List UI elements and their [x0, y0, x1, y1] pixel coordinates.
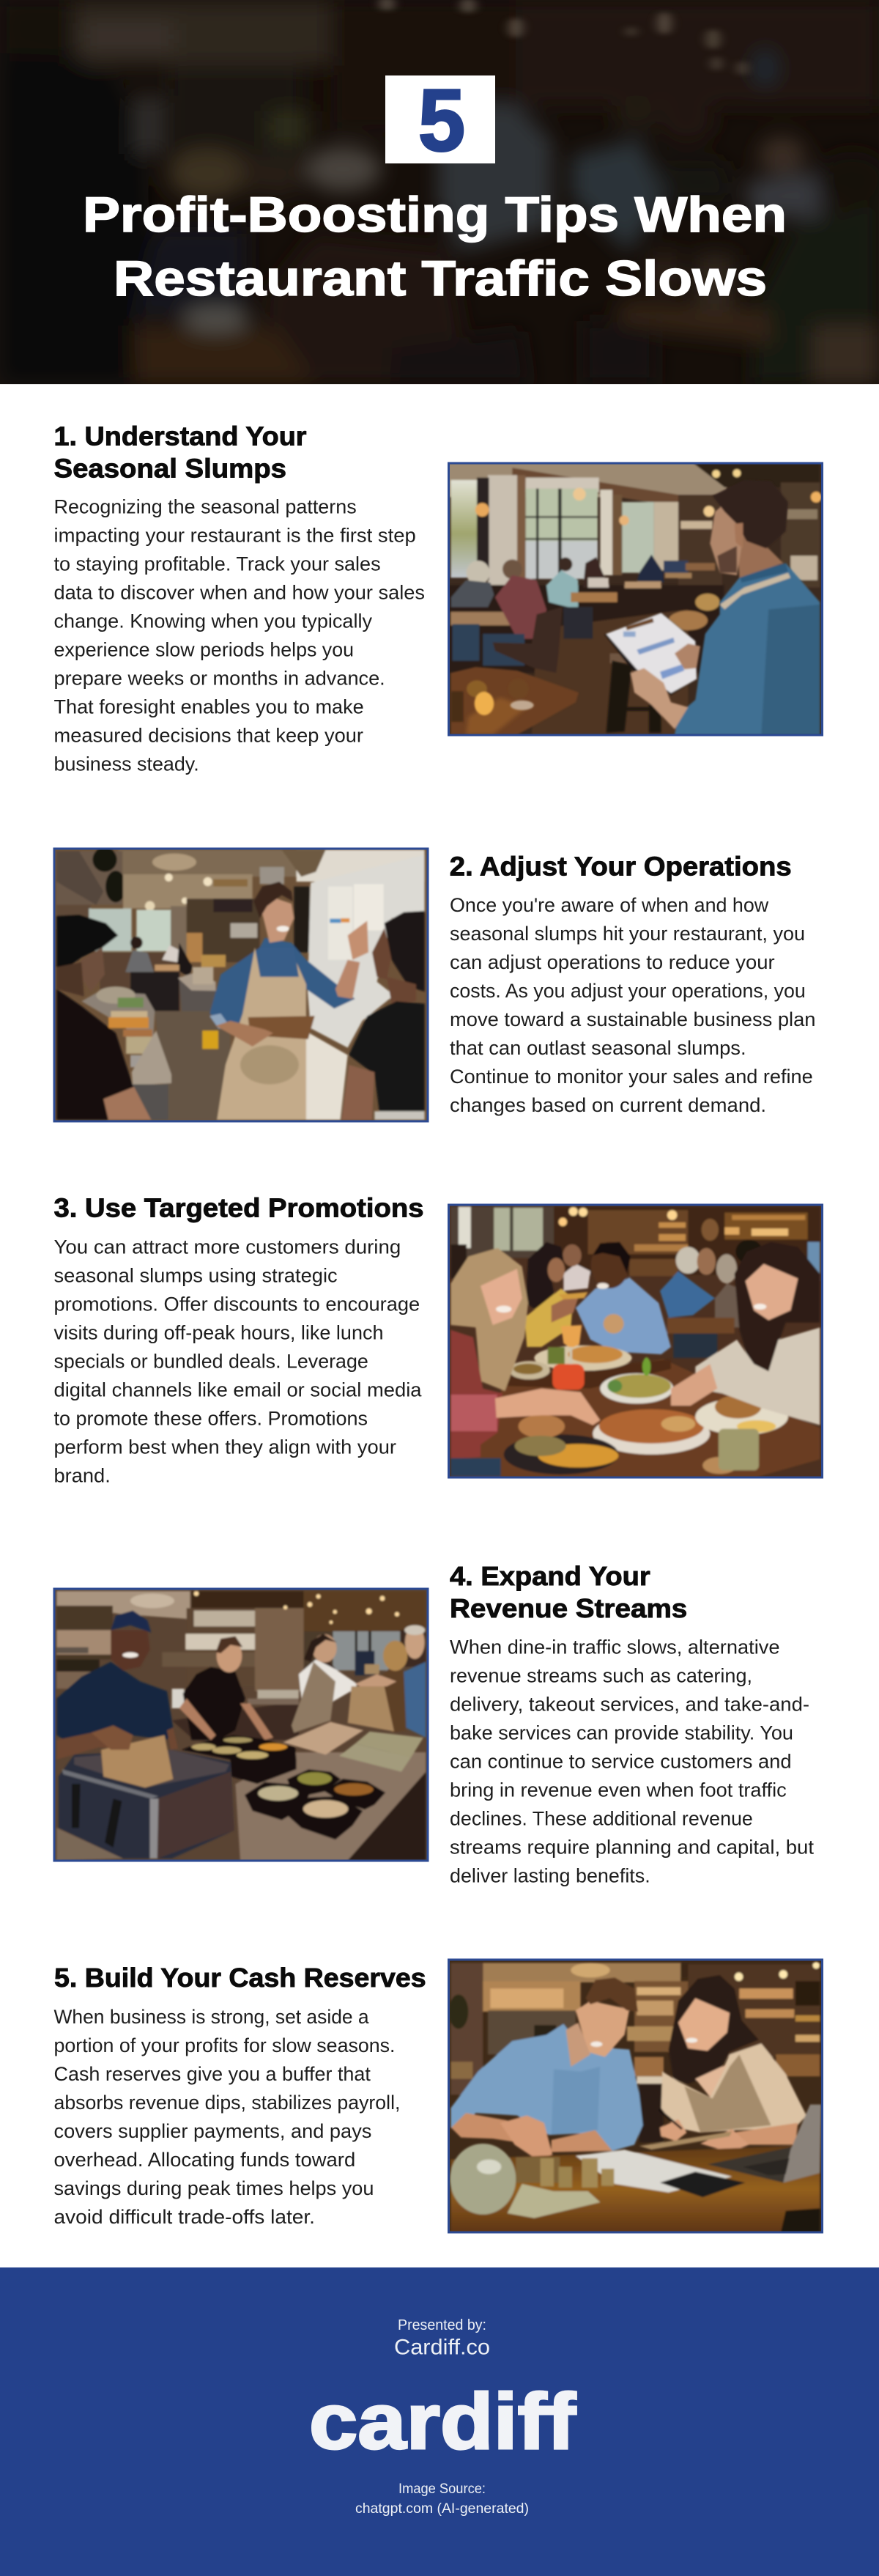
tip 5 panel: [54, 1960, 822, 2232]
hero background photo: dim restaurant interior: [0, 0, 879, 384]
tip 1 body text: data to discover when and how your sales: [54, 582, 425, 604]
tip 3 body text: specials or bundled deals. Leverage: [54, 1350, 368, 1372]
tip 3 body text: to promote these offers. Promotions: [54, 1407, 368, 1429]
tip 2 body text: seasonal slumps hit your restaurant, you: [450, 923, 805, 945]
tip 1 photo: manager with clipboard in dining room: [448, 463, 822, 735]
tip 3 body text: promotions. Offer discounts to encourage: [54, 1293, 420, 1315]
tip 4 body text: revenue streams such as catering,: [450, 1664, 752, 1686]
tip 2 body text: can adjust operations to reduce your: [450, 951, 775, 973]
tip 1 panel: [54, 421, 822, 775]
tip 2 body text: Once you're aware of when and how: [450, 894, 769, 916]
tip 1 body text: experience slow periods helps you: [54, 639, 354, 661]
tip 1 heading: 1. Understand Your: [54, 421, 306, 451]
white box with number 5: 5: [418, 72, 465, 170]
tip 3 body text: seasonal slumps using strategic: [54, 1264, 338, 1286]
tip 1 heading: Seasonal Slumps: [54, 454, 286, 484]
title: Restaurant Traffic Slows: [114, 251, 767, 306]
tip 5 body text: covers supplier payments, and pays: [54, 2120, 371, 2142]
tip 3 panel: [54, 1193, 822, 1486]
tip 5 body text: portion of your profits for slow seasons.: [54, 2034, 396, 2056]
tip 3 body text: digital channels like email or social media: [54, 1379, 422, 1400]
tip 5 body text: [54, 2006, 400, 2228]
title: [83, 187, 787, 306]
tip 1 heading: [54, 421, 306, 484]
tip 1 body text: measured decisions that keep your: [54, 725, 363, 747]
tip 4 body text: can continue to service customers and: [450, 1750, 792, 1772]
white box with number 5: [385, 72, 495, 170]
tip 3 heading: 3. Use Targeted Promotions: [54, 1193, 423, 1223]
tip 1 body text: prepare weeks or months in advance.: [54, 668, 385, 690]
tip 2 body text: that can outlast seasonal slumps.: [450, 1037, 746, 1059]
tip 4 body text: declines. These additional revenue: [450, 1807, 753, 1829]
image source credit: Image Source:: [398, 2481, 486, 2497]
tip 4 body text: [450, 1636, 815, 1886]
tip 4 photo border: [54, 1589, 428, 1861]
tip 3 body text: perform best when they align with your: [54, 1436, 396, 1458]
tip 1 body text: That foresight enables you to make: [54, 696, 364, 718]
tip 1 body text: Recognizing the seasonal patterns: [54, 496, 357, 518]
tip 5 photo: couple counting cash and coins: [448, 1960, 822, 2232]
tip 3 body text: [54, 1236, 422, 1486]
tip 1 body text: change. Knowing when you typically: [54, 610, 372, 632]
tip 4 body text: When dine-in traffic slows, alternative: [450, 1636, 779, 1658]
tip 2 body text: [450, 894, 816, 1116]
tip 4 photo: delivery and takeout prep in kitchen: [54, 1589, 428, 1861]
tip 2 body text: Continue to monitor your sales and refine: [450, 1066, 813, 1088]
tip 5 heading: 5. Build Your Cash Reserves: [54, 1963, 426, 1993]
tip 2 photo: chef at whiteboard with staff in kitchen: [54, 847, 428, 1121]
tip 1 body text: to staying profitable. Track your sales: [54, 553, 381, 575]
tip 3 body text: brand.: [54, 1464, 111, 1486]
tip 4 body text: bring in revenue even when foot traffic: [450, 1779, 787, 1801]
footer band: [0, 2267, 879, 2576]
tip 4 body text: streams require planning and capital, but: [450, 1836, 815, 1858]
tip 2 body text: costs. As you adjust your operations, you: [450, 980, 806, 1002]
tip 5 body text: avoid difficult trade-offs later.: [54, 2206, 315, 2228]
tip 1 body text: [54, 496, 425, 775]
image source credit: chatgpt.com (AI-generated): [355, 2501, 529, 2517]
cardiff logo wordmark: cardiff: [309, 2377, 576, 2465]
tip 3 photo border: [448, 1205, 822, 1477]
tip 1 body text: impacting your restaurant is the first step: [54, 525, 416, 547]
tip 3 body text: You can attract more customers during: [54, 1236, 401, 1258]
tip 1 photo border: [448, 463, 822, 735]
title: Profit-Boosting Tips When: [83, 187, 787, 243]
tip 4 heading: 4. Expand Your: [450, 1561, 650, 1591]
tip 4 body text: delivery, takeout services, and take-and-: [450, 1693, 809, 1715]
tip 5 body text: Cash reserves give you a buffer that: [54, 2063, 371, 2085]
tip 5 body text: savings during peak times helps you: [54, 2177, 374, 2199]
hero banner: [0, 0, 879, 384]
tip 2 heading: 2. Adjust Your Operations: [450, 851, 792, 881]
tip 5 photo border: [448, 1960, 822, 2232]
tip 5 body text: overhead. Allocating funds toward: [54, 2149, 355, 2171]
tip 3 photo: diners sharing food: [448, 1205, 822, 1477]
tip 4 body text: bake services can provide stability. You: [450, 1721, 793, 1743]
tip 2 body text: changes based on current demand.: [450, 1094, 766, 1116]
tip 4 panel: [54, 1561, 815, 1886]
tip 1 body text: business steady.: [54, 753, 199, 775]
company url: Cardiff.co: [394, 2336, 490, 2360]
tip 4 heading: Revenue Streams: [450, 1593, 687, 1623]
tip 3 body text: visits during off-peak hours, like lunch: [54, 1321, 384, 1343]
tip 2 panel: [54, 847, 816, 1121]
tip 2 body text: move toward a sustainable business plan: [450, 1008, 816, 1030]
tip 2 photo border: [54, 849, 428, 1121]
tip 4 body text: deliver lasting benefits.: [450, 1864, 650, 1886]
presented by label: Presented by:: [398, 2317, 486, 2333]
image source credit: [355, 2481, 529, 2517]
tip 4 heading: [450, 1561, 687, 1623]
tip 5 body text: absorbs revenue dips, stabilizes payroll,: [54, 2092, 400, 2114]
tip 5 body text: When business is strong, set aside a: [54, 2006, 370, 2028]
